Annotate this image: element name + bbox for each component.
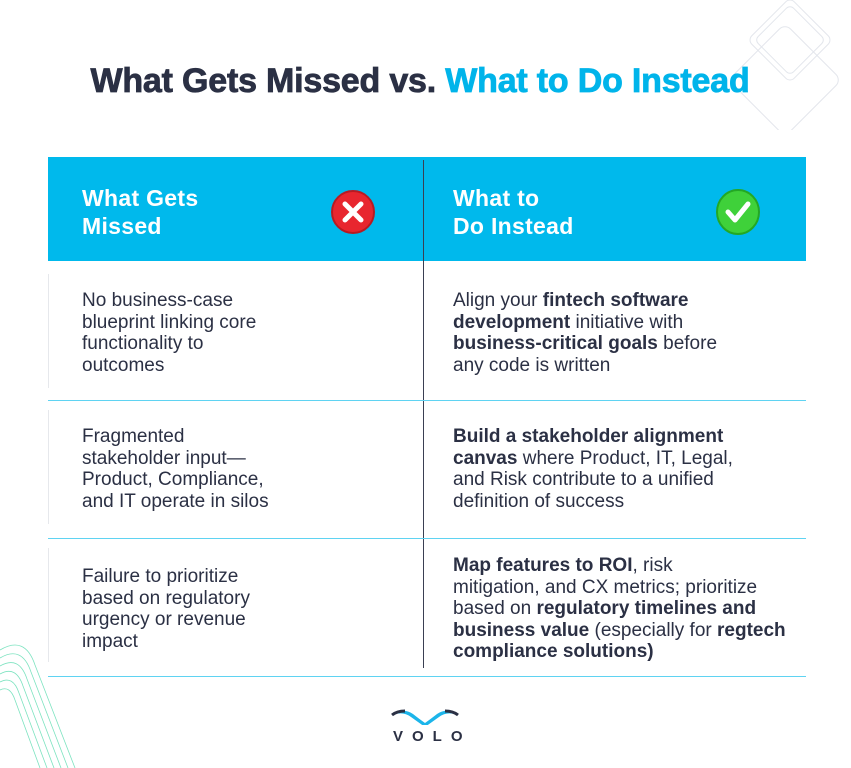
decoration: curved lines bottom-left [0, 644, 76, 768]
row 2 left [82, 426, 269, 512]
row 2 left: and IT operate in silos [82, 490, 269, 512]
icon: green check [716, 189, 760, 235]
heading: what to do instead [453, 185, 574, 239]
row 2 right [453, 426, 733, 512]
row 2 right: definition of success [453, 490, 624, 512]
row 3 right: mitigation, and CX metrics; prioritize [453, 576, 757, 598]
row 1 right: Align your fintech software [453, 290, 688, 311]
row 3 left: based on regulatory [82, 588, 250, 608]
row 1 left: outcomes [82, 354, 164, 376]
row 3 right [453, 555, 786, 662]
row 3 left: impact [82, 630, 138, 652]
row 3 right: compliance solutions) [453, 641, 654, 662]
heading: what to do instead: Do Instead [453, 213, 574, 239]
row 3 left [82, 566, 250, 652]
header band [48, 157, 806, 261]
row 3 right: based on regulatory timelines and [453, 598, 756, 619]
row 3 left: Failure to prioritize [82, 566, 238, 587]
row 2 left: Product, Compliance, [82, 469, 264, 490]
heading: what gets missed [82, 185, 198, 239]
row 1 left: functionality to [82, 333, 203, 354]
decoration: diamonds top-right [734, 0, 839, 130]
dividers [423, 160, 424, 668]
row 1 right: business-critical goals before [453, 333, 717, 354]
row 1 left [82, 290, 256, 376]
row 2 right: and Risk contribute to a unified [453, 469, 714, 490]
logo: volo [391, 710, 472, 745]
logo: volo: VOLO [393, 728, 472, 745]
icon: red x [331, 190, 375, 234]
row 1 right: any code is written [453, 354, 610, 376]
row 1 left: blueprint linking core [82, 312, 256, 332]
row 2 left: stakeholder input— [82, 448, 246, 468]
title: What Gets Missed vs. What to Do Instead [90, 62, 750, 100]
row 1 left: No business-case [82, 290, 233, 311]
row 1 right [453, 290, 717, 376]
row 2 right: canvas where Product, IT, Legal, [453, 448, 733, 468]
row 3 right: business value (especially for regtech [453, 620, 786, 640]
row 2 left: Fragmented [82, 426, 184, 447]
row 1 right: development initiative with [453, 312, 683, 332]
heading: what gets missed: What Gets [82, 185, 198, 211]
row 3 right: Map features to ROI, risk [453, 555, 673, 576]
row 3 left: urgency or revenue [82, 609, 246, 630]
heading: what gets missed: Missed [82, 213, 162, 239]
row 2 right: Build a stakeholder alignment [453, 426, 723, 447]
heading: what to do instead: What to [453, 185, 539, 211]
